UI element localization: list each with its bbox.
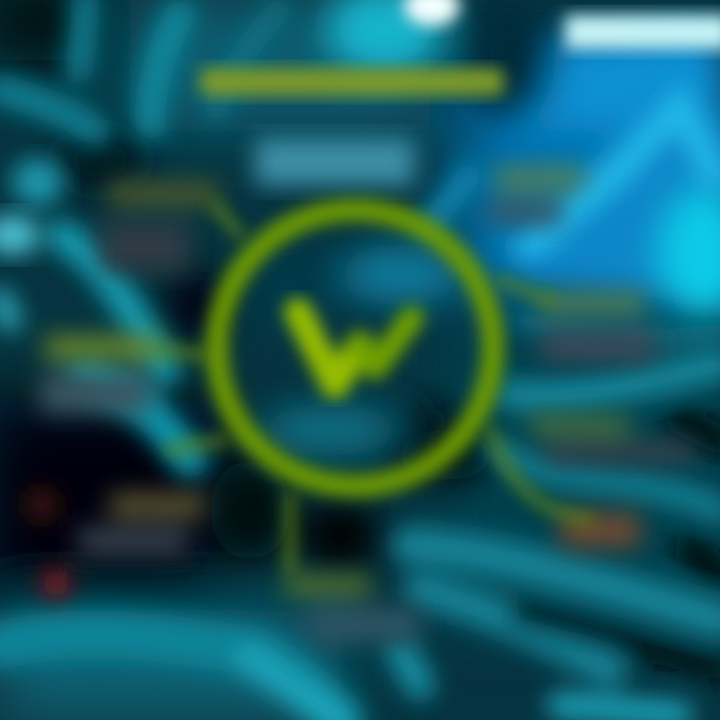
label block: upper right bbox=[488, 166, 585, 226]
label block: lower left bbox=[27, 490, 205, 598]
mountain ridge bbox=[530, 105, 715, 245]
top-left fronds bbox=[0, 90, 95, 130]
connector lines bbox=[160, 205, 590, 570]
title bbox=[200, 68, 504, 96]
label block: lower right bbox=[530, 416, 695, 548]
left decorative node bbox=[12, 158, 64, 206]
label block: middle right bbox=[540, 293, 655, 362]
central logo mark bbox=[298, 312, 412, 385]
left flowing band bbox=[60, 235, 165, 370]
left decorative node bbox=[0, 215, 40, 255]
top glow bbox=[404, 0, 460, 26]
label block: bottom centre bbox=[285, 576, 420, 642]
top right white banner bbox=[565, 15, 720, 49]
label block: upper left bbox=[100, 183, 218, 272]
ring interior shading bbox=[250, 240, 460, 455]
lower bands bbox=[0, 635, 340, 720]
central ring bbox=[217, 210, 493, 486]
subtitle bbox=[255, 138, 415, 186]
label block: middle left bbox=[40, 336, 160, 413]
